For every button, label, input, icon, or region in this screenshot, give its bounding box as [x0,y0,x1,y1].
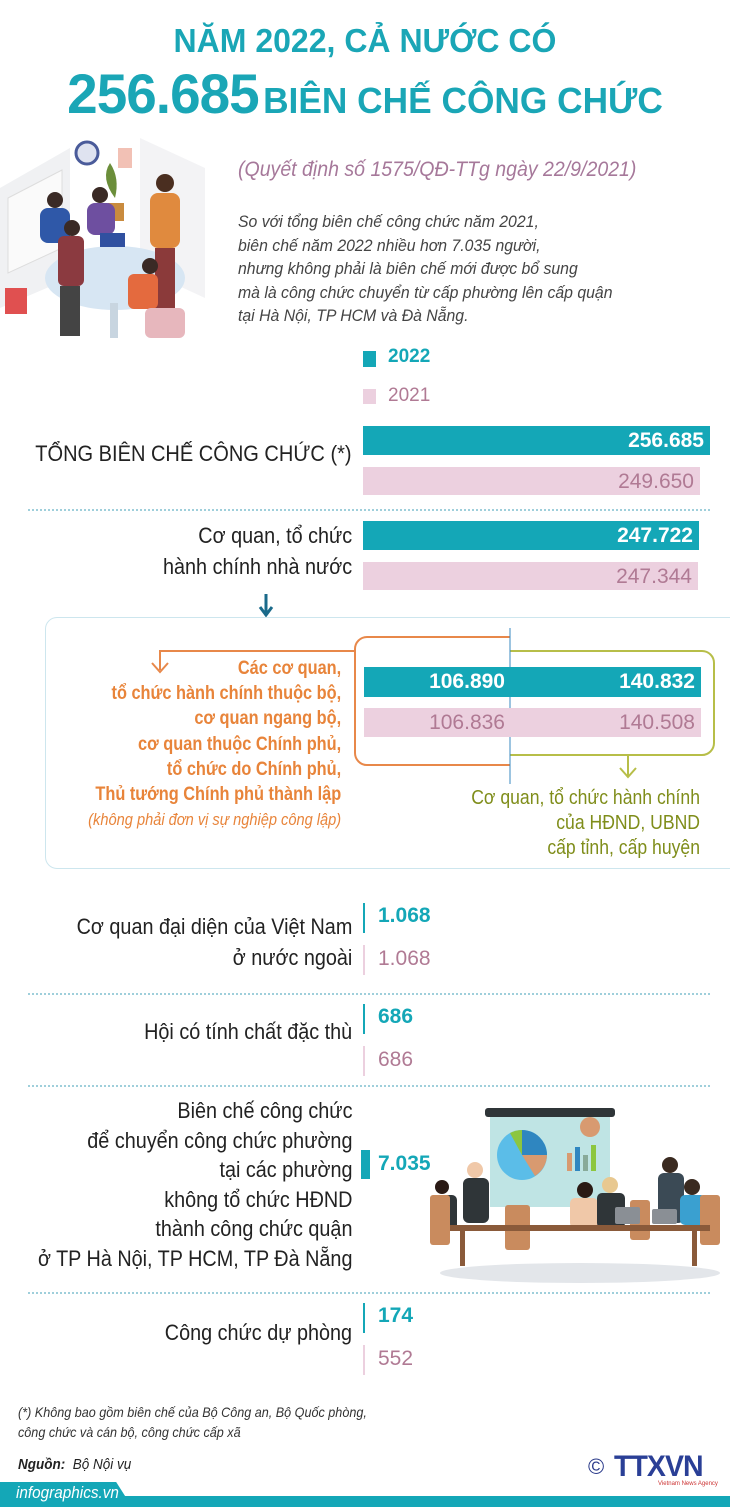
logo: TTXVN: TTXVN [614,1450,703,1483]
bars: 106.890 [429,670,505,693]
panel: breakdown of administrative agencies [45,617,730,869]
row: representative agencies abroad: ở nước ngoài [232,945,352,970]
legend: 2021 [388,385,430,406]
row: state administrative agencies: hành chính nhà nước [163,554,352,579]
footnote: công chức và cán bộ, công chức cấp xã [18,1424,241,1440]
row: representative agencies abroad [76,903,431,975]
row: ward-to-district transfers: Biên chế công chức [177,1098,352,1123]
legend: 2022 [388,346,430,367]
row: representative agencies abroad: 1.068 [378,904,431,927]
row: reserve civil servants [165,1303,413,1375]
row: special associations [144,1004,413,1076]
intro paragraph: So với tổng biên chế công chức năm 2021, [238,212,539,231]
connectors [151,628,715,784]
row: state administrative agencies: Cơ quan, tổ chức [198,523,352,548]
row: state administrative agencies: 247.722 [617,524,693,547]
row: state administrative agencies: 247.344 [616,565,692,588]
intro paragraph: mà là công chức chuyển từ cấp phường lên cấp quận [238,282,612,302]
orange text: cơ quan ngang bộ, [194,708,341,729]
illustration: presentation meeting [430,1108,720,1283]
row: reserve civil servants: Công chức dự phòng [165,1320,352,1345]
row: ward-to-district transfers: ở TP Hà Nội, TP HCM, TP Đà Nẵng [37,1246,352,1270]
intro paragraph: tại Hà Nội, TP HCM và Đà Nẵng. [238,306,468,325]
row: special associations: 686 [378,1005,413,1028]
intro paragraph: nhưng không phải là biên chế mới được bổ sung [238,259,578,278]
illustration: team meeting [0,138,205,338]
row: total civil servants: 256.685 [628,429,704,452]
olive text: của HĐND, UBND [556,812,700,834]
row: total civil servants: TỔNG BIÊN CHẾ CÔNG CHỨC (*) [36,441,352,466]
olive text: Cơ quan, tổ chức hành chính [471,787,700,809]
orange text: tổ chức do Chính phủ, [167,759,341,780]
orange text: Các cơ quan, [238,658,341,679]
row: representative agencies abroad: Cơ quan đại diện của Việt Nam [76,914,352,939]
logo: TTXVN: © [588,1454,604,1479]
source: Nguồn: Bộ Nội vụ [18,1456,131,1473]
panel: breakdown of administrative agencies: 140.508 [619,711,695,734]
title: NĂM 2022, CẢ NƯỚC CÓ [174,22,556,59]
row: ward-to-district transfers [37,1098,431,1270]
orange text: Thủ tướng Chính phủ thành lập [95,784,341,805]
row: ward-to-district transfers: để chuyển công chức phường [87,1128,352,1152]
title: 256.685 BIÊN CHẾ CÔNG CHỨC [67,62,663,125]
logo: TTXVN: Vietnam News Agency [658,1481,718,1487]
footnote [18,1404,367,1440]
footer band: infographics.vn [16,1483,119,1502]
row: ward-to-district transfers: tại các phường [219,1157,352,1182]
row: ward-to-district transfers: 7.035 [378,1152,431,1175]
row: special associations: Hội có tính chất đặc thù [144,1019,352,1044]
orange text: cơ quan thuộc Chính phủ, [138,734,341,755]
intro paragraph [238,212,612,325]
row: representative agencies abroad: 1.068 [378,947,431,970]
row: ward-to-district transfers: không tổ chức HĐND [164,1186,352,1212]
panel: breakdown of administrative agencies: 106.836 [429,711,505,734]
row: reserve civil servants: 174 [378,1304,413,1327]
panel: breakdown of administrative agencies: 140.832 [619,670,695,693]
orange text: (không phải đơn vị sự nghiệp công lập) [88,810,341,829]
row: total civil servants: 249.650 [618,470,694,493]
arrow down [258,594,274,617]
olive text [471,787,700,859]
row: state administrative agencies [163,521,699,590]
row: ward-to-district transfers: thành công chức quận [155,1216,352,1241]
olive text: cấp tỉnh, cấp huyện [547,837,700,859]
footer band [0,1482,730,1507]
title [67,22,663,125]
logo: TTXVN [588,1450,718,1487]
orange text [88,658,341,829]
row: special associations: 686 [378,1048,413,1071]
orange text: tổ chức hành chính thuộc bộ, [111,683,341,704]
row: reserve civil servants: 552 [378,1347,413,1370]
footnote: (*) Không bao gồm biên chế của Bộ Công an, Bộ Quốc phòng, [18,1404,367,1420]
bars [364,667,511,697]
row: total civil servants [36,426,710,495]
intro paragraph: biên chế năm 2022 nhiều hơn 7.035 người, [238,236,541,254]
subtitle: decision reference: (Quyết định số 1575/QĐ-TTg ngày 22/9/2021) [238,158,636,181]
legend [363,346,430,406]
